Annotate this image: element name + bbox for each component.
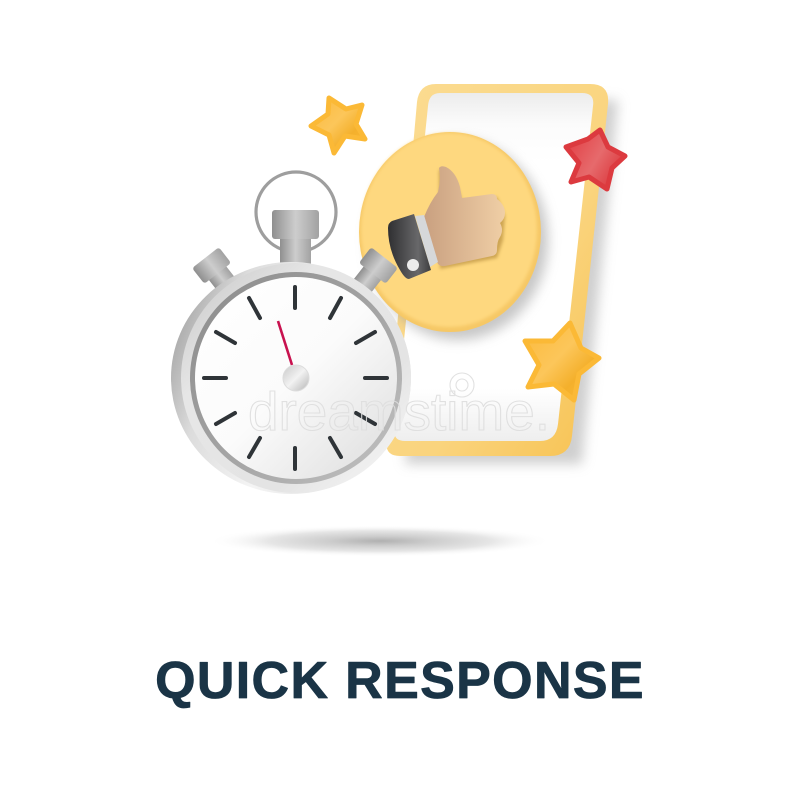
inner bezel [181,263,411,493]
title: QUICK RESPONSE [155,652,645,710]
crown [272,210,319,266]
jacket sleeve [388,214,431,279]
left button [192,247,243,300]
watermark logo: dreamstime. [248,382,550,442]
hand [424,166,505,266]
phone card [387,84,618,464]
stopwatch [171,172,411,494]
shirt cuff [415,215,438,267]
center pin [283,365,309,391]
hand shadow [439,170,505,269]
phone screen [394,93,593,441]
gold star top left [311,98,365,153]
badge disc [359,132,541,332]
floor shadow [208,525,552,557]
ring [256,172,336,252]
thumbs up hand [388,166,505,279]
right button [347,247,398,300]
red star [566,130,625,189]
dial face [195,277,397,479]
sleeve button [407,259,419,271]
hour ticks [204,287,387,469]
phone yellow frame [387,84,608,456]
gold star bottom right [525,323,599,400]
yellow circle badge [359,132,548,340]
phone drop shadow [405,100,618,464]
outer case [171,262,411,494]
badge highlight [361,133,537,327]
red second hand [278,321,292,365]
badge shadow [368,140,548,340]
dark ring [190,272,402,484]
